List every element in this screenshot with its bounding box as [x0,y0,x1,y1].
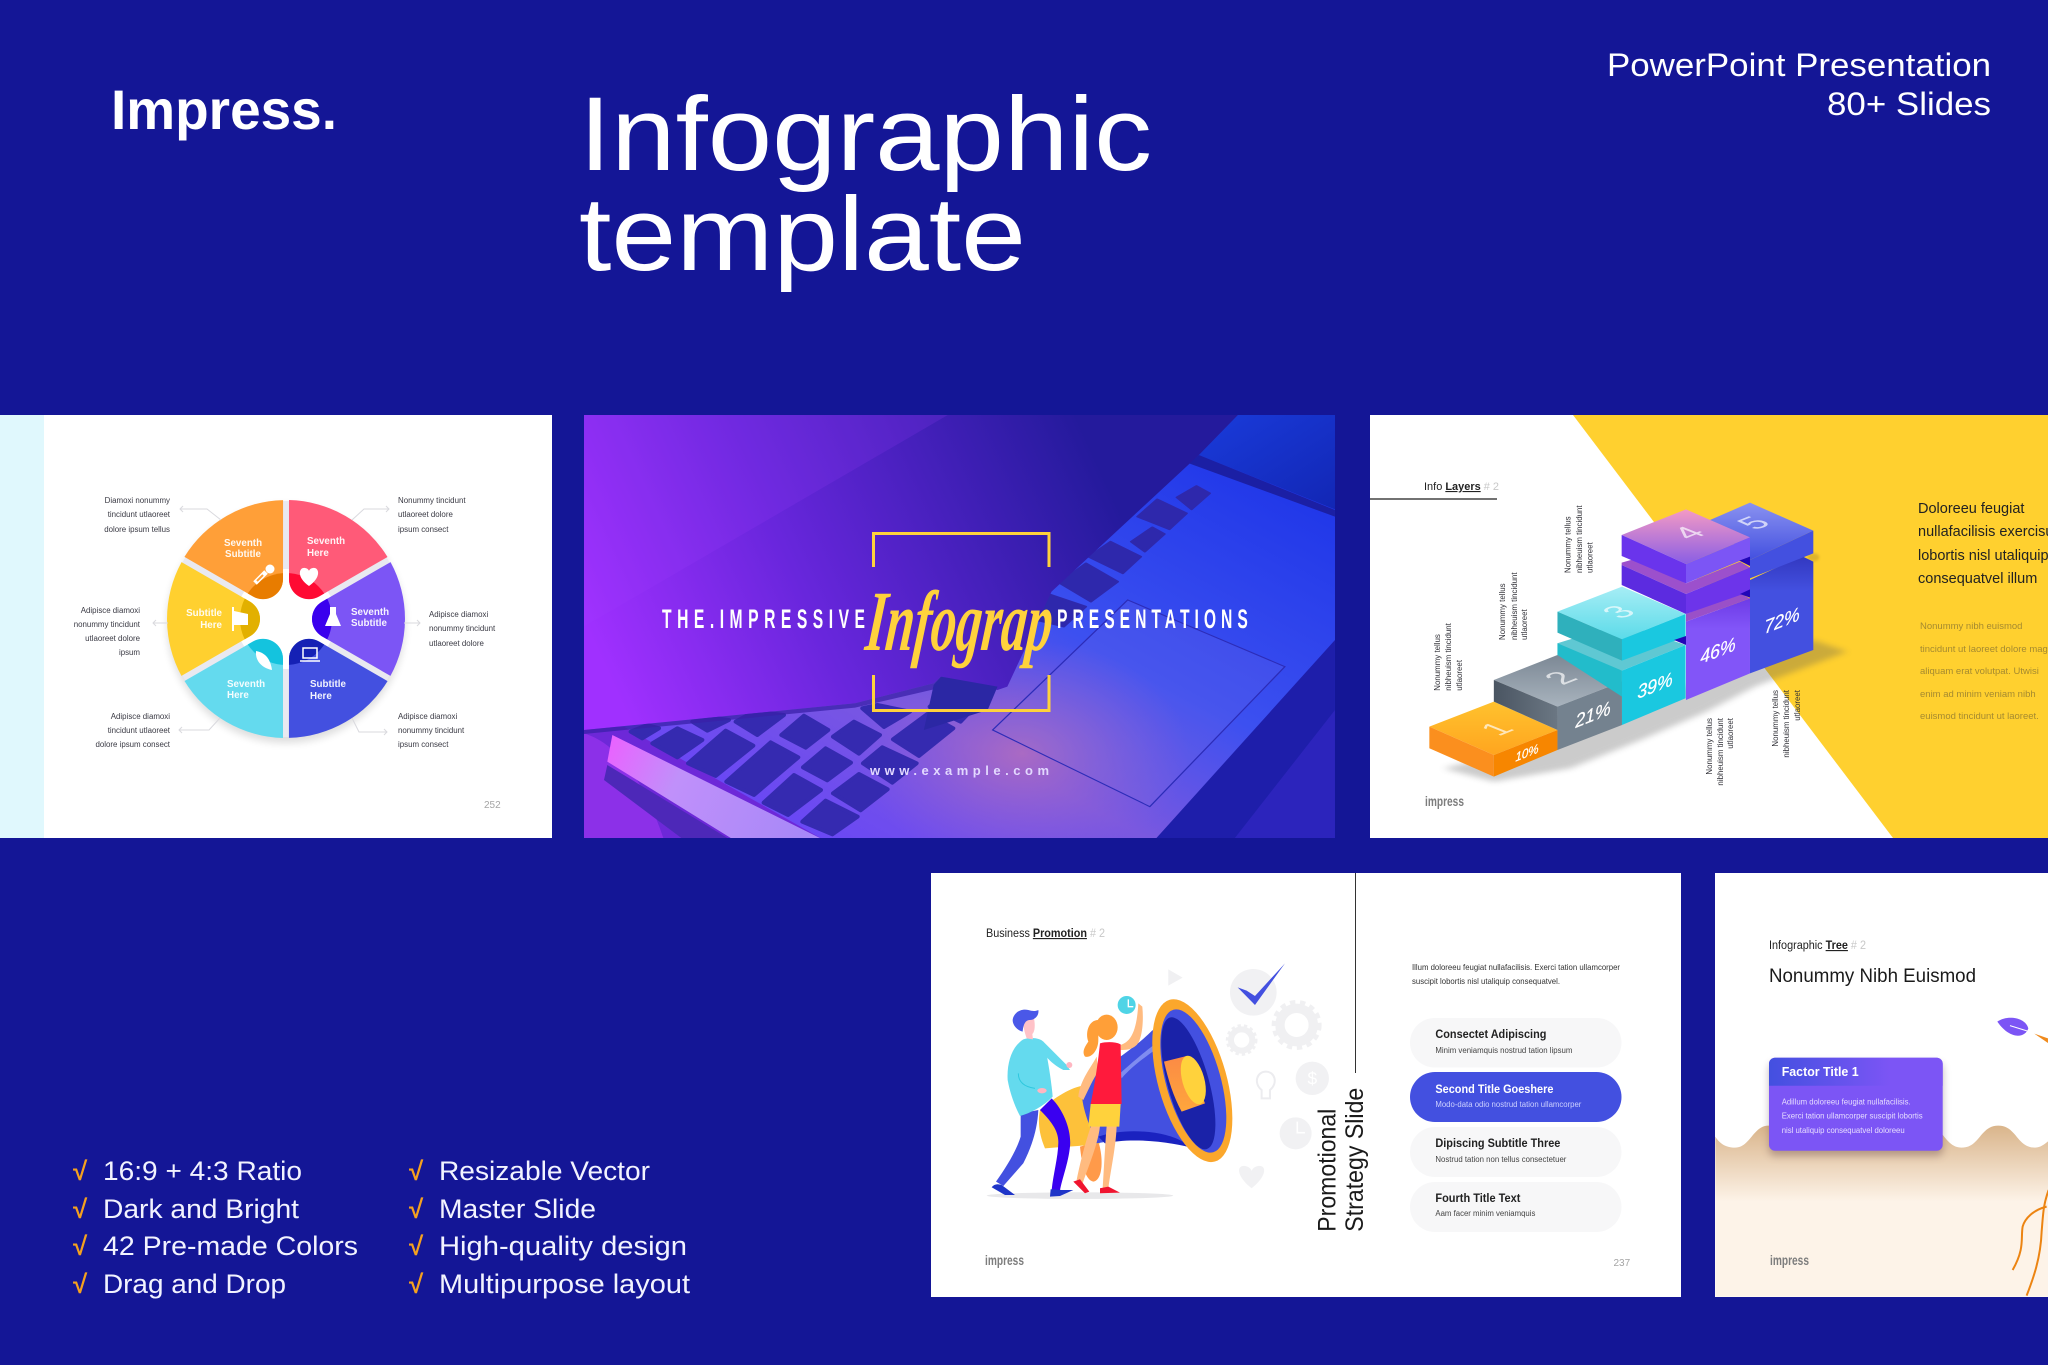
block 3 [1557,587,1686,725]
block percentages: 10% [1515,741,1539,765]
woman figure [1073,996,1143,1193]
yellow panel body text: Nonummy nibh euismod [1920,621,2022,632]
rotated captions: utlaoreet [1455,659,1464,691]
rotated captions: Nonummy tellus [1705,718,1714,775]
yellow panel heading text: lobortis nisl utaliquip [1918,548,2048,564]
block numbers [1484,516,1768,736]
panel: pie infographic slide [0,415,552,838]
panel: feature list: High-quality design [439,1231,687,1261]
cover headline script: Infograp [861,573,1058,669]
sector labels: Seventh [307,536,345,547]
side captions: nonummy tincidunt [429,624,496,633]
panel: feature list: √ [409,1194,424,1224]
rotated captions: utlaoreet [1793,689,1802,721]
man figure [992,1010,1073,1197]
panel: feature list: √ [73,1156,88,1186]
side captions: tincidunt utlaoreet [108,510,171,519]
icon: laptop [300,648,320,661]
yellow panel body text [1920,621,2048,722]
background icons: $ [1307,1068,1317,1088]
side captions: utlaoreet dolore [85,634,141,643]
top right caption: 80+ Slides [1827,86,1991,122]
panel: feature list: Master Slide [439,1194,596,1224]
panel: infographic tree slide [1715,873,2048,1297]
block percentages [1515,604,1800,765]
factor card: Exerci tation ullamcorper suscipit lobortis [1782,1112,1923,1121]
option pill 3: Nostrud tation non tellus consectetuer [1435,1155,1567,1164]
keyboard [584,692,975,840]
slide heading [1370,481,1499,499]
side captions: utlaoreet dolore [429,639,484,648]
page number: 252 [484,800,501,811]
option pill 3 [1410,1127,1622,1177]
intro paragraph [1412,962,1620,986]
sector labels: Here [310,691,332,702]
icon: heart [300,568,318,586]
side captions: Adipisce diamoxi [429,610,488,619]
yellow panel body text: enim ad minim veniam nibh [1920,689,2036,700]
panel: feature list: √ [73,1231,88,1261]
icon: leaf [1997,1018,2048,1043]
side captions: dolore ipsum consect [95,740,171,749]
yellow panel body text: euismod tincidunt ut laoreet. [1920,711,2039,722]
side captions: ipsum [119,648,140,657]
panel: feature list: Dark and Bright [103,1194,300,1224]
panel: feature list: √ [73,1269,88,1299]
logo: impress [1770,1252,1809,1268]
rotated captions: nibheuism tincidunt [1782,689,1791,758]
factor card: nisl utaliquip consequatvel doloreeu [1782,1126,1905,1135]
yellow panel heading text: Doloreeu feugiat [1918,501,2024,517]
panel: feature list: Drag and Drop [103,1269,286,1299]
slide heading: Info Layers # 2 [1424,481,1499,493]
logo: impress [1425,793,1464,809]
side captions: Adipisce diamoxi [398,712,457,721]
sector labels [186,536,389,702]
logo: impress [985,1252,1024,1268]
title [579,76,1152,293]
background icons [1168,969,1329,1188]
soil wave [1715,1126,2048,1297]
yellow panel heading text [1918,501,2048,587]
sector labels: Seventh [351,607,389,618]
gap shadows [1674,557,1750,645]
side captions: ipsum consect [398,525,449,534]
rotated captions: utlaoreet [1586,541,1595,573]
yellow panel body text: aliquam erat volutpat. Utwisi [1920,666,2039,677]
checkmark [1238,963,1285,1005]
page number: 237 [1614,1258,1631,1269]
rotated captions: Nonummy tellus [1433,634,1442,691]
option pill 4 [1410,1182,1622,1232]
panel: feature list: 16:9 + 4:3 Ratio [103,1156,302,1186]
block percentages: 21% [1574,698,1611,733]
side captions: ipsum consect [398,740,449,749]
option pill 1: Minim veniamquis nostrud tation lipsum [1435,1046,1573,1055]
rotated captions: nibheuism tincidunt [1444,622,1453,691]
lower blocks [1429,587,1847,782]
block 5 [1710,503,1813,673]
block percentages: 72% [1764,604,1800,639]
laptop lid [584,415,1238,734]
sector labels: Here [200,620,223,631]
block percentages: 39% [1637,669,1673,704]
side captions: nonummy tincidunt [74,620,141,629]
tree roots [2013,1190,2048,1296]
panel: info layers slide [1370,415,2048,838]
option pill 2 highlighted: Second Title Goeshere [1435,1084,1553,1096]
panel: business promotion slide [931,873,1681,1297]
icon: flag [232,607,248,631]
rotated slide title: Strategy Slide [1341,1088,1369,1232]
panel: feature list [73,1156,691,1299]
side captions: dolore ipsum tellus [104,525,170,534]
factor card: Factor Title 1 [1782,1064,1859,1079]
rotated captions: Nonummy tellus [1771,690,1780,747]
title: Infographic [579,76,1152,193]
panel: feature list: 42 Pre-made Colors [103,1231,358,1261]
laptop base and screen [580,410,1336,840]
option pill 1: Consectet Adipiscing [1435,1029,1546,1041]
megaphone [1039,991,1248,1182]
icon: flask [325,607,341,626]
sector labels: Seventh [227,679,265,690]
sector labels: Subtitle [225,549,262,560]
intro paragraph: suscipit lobortis nisl utaliquip consequatvel. [1412,976,1560,986]
ground shadow [987,1192,1173,1199]
yellow panel heading text: consequatvel illum [1918,571,2037,587]
panel: feature list: √ [409,1269,424,1299]
rotated slide title: Promotional [1313,1109,1341,1232]
sector labels: Subtitle [351,618,387,629]
pie chart [164,500,408,746]
sector labels: Subtitle [186,608,223,619]
option pill 4: Aam facer minim veniamquis [1435,1209,1535,1218]
panel: feature list: √ [409,1231,424,1261]
rotated captions: Nonummy tellus [1498,583,1507,640]
rotated captions: utlaoreet [1726,717,1735,749]
sector labels: Seventh [224,538,262,549]
brand logo: Impress. [111,78,337,141]
side captions: Adipisce diamoxi [81,606,140,615]
option pill 3: Dipiscing Subtitle Three [1435,1138,1560,1150]
slide heading: Infographic Tree # 2 [1769,940,1866,952]
side captions: tincidunt utlaoreet [108,726,171,735]
sector labels: Here [227,690,249,701]
panel: feature list: √ [409,1156,424,1186]
rotated captions: nibheuism tincidunt [1510,572,1519,640]
sector labels: Subtitle [310,679,346,690]
rotated captions: Nonummy tellus [1564,516,1573,573]
factor card [1769,1058,1943,1156]
block numbers: 5 [1728,513,1779,533]
side captions: Nonummy tincidunt [398,496,466,505]
upper blocks [1622,503,1819,700]
option pill 2 highlighted [1410,1072,1622,1122]
block numbers: 4 [1663,523,1714,543]
isometric staircase chart [1429,503,1847,782]
side captions: utlaoreet dolore [398,510,453,519]
factor card: Adillum doloreeu feugiat nullafacilisis. [1782,1098,1911,1107]
side captions: Adipisce diamoxi [111,712,170,721]
rotated captions: nibheuism tincidunt [1716,717,1725,786]
panel: feature list: Resizable Vector [439,1156,650,1186]
option pill 1 [1410,1018,1622,1068]
url: www.example.com [869,763,1049,778]
title: template [579,176,1026,293]
block numbers: 1 [1471,719,1522,739]
side captions: Diamoxi nonummy [105,496,170,505]
top right caption: PowerPoint Presentation [1607,47,1991,83]
connectors [153,506,420,735]
cover headline left: THE.IMPRESSIVE [662,604,865,634]
panel: feature list: Multipurpose layout [439,1269,691,1299]
icon: dropper [255,564,274,583]
cover headline right: PRESENTATIONS [1057,604,1248,634]
block 1 [1429,702,1557,777]
rotated slide title [1313,1088,1369,1232]
rotated captions [1433,505,1802,786]
block numbers: 3 [1593,602,1644,622]
rotated captions: utlaoreet [1520,608,1529,640]
block numbers: 2 [1535,668,1586,688]
icon: leaf [256,651,272,670]
block percentages: 46% [1700,634,1736,669]
intro paragraph: Illum doloreeu feugiat nullafacilisis. Exerci tation ullamcorper [1412,962,1620,972]
top right caption [1607,47,1991,122]
side captions [74,496,496,749]
panel: laptop cover slide [580,410,1336,840]
option pill 4: Fourth Title Text [1435,1193,1521,1205]
option pill 2 highlighted: Modo-data odio nostrud tation ullamcorper [1435,1100,1582,1109]
panel: feature list: √ [73,1194,88,1224]
slide heading: Business Promotion # 2 [986,928,1105,940]
slide title: Nonummy Nibh Euismod [1769,966,1976,987]
block 4 [1622,509,1750,700]
block 2 [1494,655,1622,750]
sector labels: Here [307,548,329,559]
rotated captions: nibheuism tincidunt [1575,505,1584,573]
yellow frame [874,534,1049,710]
megaphone illustration [987,963,1329,1199]
side captions: nonummy tincidunt [398,726,465,735]
